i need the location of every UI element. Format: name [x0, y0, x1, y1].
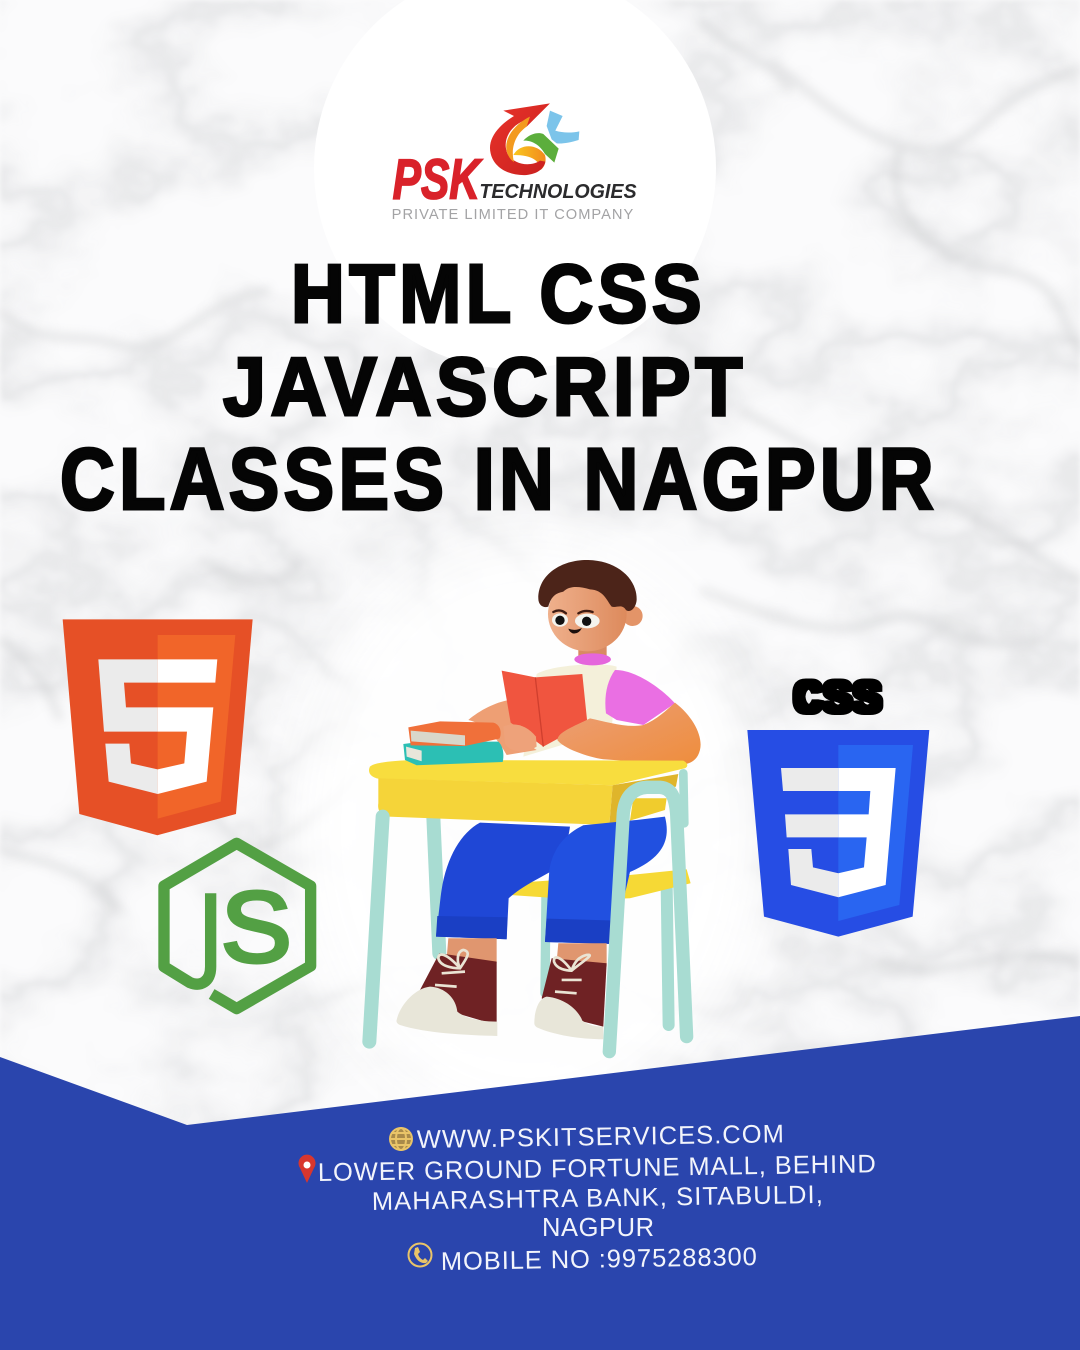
open book: [502, 671, 587, 747]
icon: CSS3 shield: [747, 674, 929, 937]
trousers: [436, 817, 667, 944]
css label: CSS: [793, 674, 882, 727]
website line: WWW.PSKITSERVICES.COM: [417, 1120, 784, 1154]
white logo circle: [314, 0, 716, 369]
address: [298, 1150, 876, 1242]
address: MAHARASHTRA BANK, SITABULDI,: [372, 1181, 823, 1216]
chair: [510, 798, 691, 900]
icon: phone: [408, 1244, 432, 1266]
left shoe: [396, 950, 497, 1036]
company logo: [392, 103, 637, 223]
arm far: [468, 700, 537, 755]
logo wordmark: PSK: [393, 149, 483, 212]
torso: [523, 664, 617, 757]
hand on book: [503, 724, 537, 751]
blue footer band: [0, 1016, 1080, 1350]
desk: [369, 760, 687, 825]
icon: map pin: [298, 1155, 315, 1183]
title: HTML CSS: [291, 247, 706, 340]
icon: HTML5 shield: [63, 619, 253, 835]
near arm: [557, 703, 701, 765]
logo word: technologies: TECHNOLOGIES: [479, 180, 637, 203]
front desk frame: [369, 787, 687, 1052]
address: LOWER GROUND FORTUNE MALL, BEHIND: [318, 1150, 876, 1187]
stacked books: [403, 721, 503, 765]
icon: Node JS hexagon: [164, 843, 311, 1009]
address: NAGPUR: [542, 1214, 654, 1242]
logo tagline: PRIVATE LIMITED IT COMPANY: [392, 207, 634, 223]
title: [60, 247, 938, 528]
title: JAVASCRIPT: [223, 340, 747, 433]
mobile line: MOBILE NO :9975288300: [441, 1243, 757, 1276]
back desk legs: [433, 773, 684, 1025]
title: CLASSES IN NAGPUR: [60, 431, 938, 528]
contact details: [298, 1120, 876, 1276]
ankles: [447, 938, 607, 967]
right shoe: [534, 955, 607, 1039]
letter S: S: [221, 871, 292, 983]
head and neck: [538, 560, 643, 665]
icon: globe: [390, 1128, 412, 1150]
illustration: student at desk: [369, 560, 701, 1052]
eyes: [552, 613, 568, 627]
sleeve: [605, 670, 675, 725]
logo mark: swoosh arrow: [490, 103, 579, 175]
mouth: [568, 628, 582, 634]
